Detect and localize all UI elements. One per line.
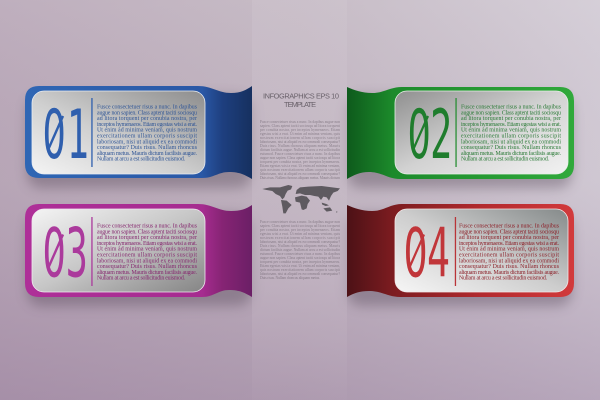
text 04: Fusce consectetuer risus a nunc. In dapibus (459, 224, 560, 230)
ribbon 02 (347, 87, 574, 179)
title: TEMPLATE (284, 100, 316, 109)
panel 02 green (347, 87, 574, 179)
title (263, 92, 339, 109)
text 03: Nullam at arcu a est sollicitudin euismod. (97, 276, 186, 282)
center text block lower: Etiam egestas wisi a erat. Ut enim ad minima veniam, (260, 264, 340, 269)
text 03: Fusce consectetuer risus a nunc. In dapibus (97, 224, 198, 230)
text 02: Nullam at arcu a est sollicitudin euismod. (461, 157, 550, 163)
text 02: inceptos hymenaeos. Etiam egestas wisi a erat. (461, 122, 562, 128)
text 01: exercitationem ullam corporis suscipit (97, 134, 197, 140)
divider 04 (455, 217, 456, 286)
text 02: consequatur? Duis risus. Nullam rhoncus (461, 145, 562, 151)
center text block upper: augue non sapien. Class aptent taciti sociosqu ad litora (260, 156, 340, 160)
text 04 (459, 224, 560, 282)
text 02 (461, 104, 562, 163)
center text block upper: Fusce consectetuer risus a nunc. In dapibus augue non (260, 120, 340, 124)
ribbon 04 (347, 204, 574, 297)
text 01: Fusce consectetuer risus a nunc. In dapibus (97, 104, 198, 110)
card 02 (395, 91, 568, 174)
center column (252, 0, 347, 400)
center text block upper: quis nostrum exercitationem ullam corporis suscipit (260, 168, 340, 172)
center text block lower (260, 220, 341, 280)
number 02: 2 (430, 95, 452, 174)
title: INFOGRAPHICS EPS 10 (263, 92, 339, 100)
center text block upper: sapien. Class aptent taciti sociosqu ad litora torquent (260, 124, 340, 128)
text 03: Ut enim ad minima veniam, quis nostrum (97, 247, 197, 253)
center text block upper: Duis risus. Nullam rhoncus aliquam metus. Mauris (260, 144, 341, 148)
ribbon 03 (25, 204, 252, 297)
text 02: ad litora torquent per conubia nostra, per (461, 116, 561, 122)
text 02: aliquam metus. Mauris dictum facilisis augue. (461, 150, 562, 157)
text 02: Fusce consectetuer risus a nunc. In dapibus (461, 104, 562, 110)
center text block lower: Duis risus. Nullam rhoncus aliquam metus. Mauris (260, 244, 341, 248)
card 03 (32, 209, 205, 292)
panel 01 blue (25, 86, 252, 179)
divider 01 (91, 98, 93, 167)
text 04: laboriosam, nisi ut aliquid ex ea commodi (459, 258, 559, 264)
text 02: Ut enim ad minima veniam, quis nostrum (461, 128, 561, 134)
center text block lower: dictum facilisis augue. Nullam at arcu a est sollicitudin (260, 248, 340, 252)
text 03: laboriosam, nisi ut aliquid ex ea commodi (97, 258, 197, 264)
center text block upper: nostrum exercitationem ullam corporis suscipit (260, 136, 340, 140)
center text block lower: torquent per conubia nostra, per inceptos hymenaeos. (260, 260, 340, 265)
text 04: Nullam at arcu a est sollicitudin euismod. (459, 276, 548, 282)
text 04: augue non sapien. Class aptent taciti sociosqu (459, 229, 559, 235)
number 03: 3 (66, 213, 88, 293)
text 03: augue non sapien. Class aptent taciti sociosqu (97, 229, 197, 235)
divider 02 (455, 98, 457, 167)
center text block lower: laboriosam, nisi ut aliquid ex ea commodi consequatur? (260, 272, 340, 277)
center text block lower: Duis risus. Nullam rhoncus aliquam metus. (260, 276, 320, 280)
center text block lower: augue non sapien. Class aptent taciti sociosqu ad litora (260, 256, 340, 260)
text 01 (97, 104, 198, 163)
text 02: augue non sapien. Class aptent taciti sociosqu (461, 110, 561, 116)
center text block lower: sapien. Class aptent taciti sociosqu ad litora torquent (260, 224, 340, 228)
number 01 (42, 95, 89, 174)
text 04: ad litora torquent per conubia nostra, per (459, 235, 559, 241)
center text block upper: Etiam egestas wisi a erat. Ut enim ad minima veniam, (260, 164, 340, 169)
center text block upper: per conubia nostra, per inceptos hymenaeos. Etiam (260, 128, 340, 133)
center text block upper: egestas wisi a erat. Ut enim ad minima veniam, quis (260, 132, 341, 137)
center text block upper (260, 120, 341, 180)
center text block upper: laboriosam, nisi ut aliquid ex ea commodi consequatur? (260, 172, 340, 177)
panel 04 red (347, 204, 574, 297)
number 01: 0 (42, 95, 66, 174)
number 04: 0 (404, 214, 428, 293)
center text block upper: euismod. Fusce consectetuer risus a nunc. In dapibus (260, 152, 341, 156)
center text block lower: nostrum exercitationem ullam corporis suscipit (260, 236, 340, 240)
panel shadows (27, 96, 572, 306)
number 02: 0 (408, 95, 431, 174)
panel 03 magenta (25, 204, 252, 297)
text 01: laboriosam, nisi ut aliquid ex ea commodi (97, 139, 197, 145)
text 01: consequatur? Duis risus. Nullam rhoncus (97, 145, 198, 151)
text 01: Nullam at arcu a est sollicitudin euismod. (97, 157, 186, 163)
ribbon 01 (25, 86, 252, 179)
center text block lower: laboriosam, nisi ut aliquid ex ea commodi consequatur? (260, 240, 340, 245)
text 04: Ut enim ad minima veniam, quis nostrum (459, 247, 559, 253)
text 03: ad litora torquent per conubia nostra, per (97, 235, 197, 241)
center text block upper: Duis risus. Nullam rhoncus aliquam metus. Mauris dictum (260, 176, 340, 180)
text 01: aliquam metus. Mauris dictum facilisis augue. (97, 150, 198, 157)
center text block lower: Fusce consectetuer risus a nunc. In dapibus augue non (260, 220, 340, 224)
number 04: 4 (427, 214, 450, 293)
divider 03 (91, 217, 93, 286)
number 03 (42, 213, 88, 293)
text 04: exercitationem ullam corporis suscipit (459, 252, 559, 258)
center text block lower: egestas wisi a erat. Ut enim ad minima veniam, quis (260, 232, 341, 237)
card 01 (32, 91, 205, 174)
text 03: inceptos hymenaeos. Etiam egestas wisi a erat. (97, 241, 198, 247)
text 04: inceptos hymenaeos. Etiam egestas wisi a erat. (459, 241, 560, 247)
text 03 (97, 224, 198, 282)
text 03: exercitationem ullam corporis suscipit (97, 252, 197, 258)
number 04 (404, 214, 450, 293)
number 03: 0 (42, 213, 66, 293)
center text block lower: quis nostrum exercitationem ullam corporis suscipit (260, 268, 340, 272)
text 04: consequatur? Duis risus. Nullam rhoncus (459, 264, 560, 270)
text 01: augue non sapien. Class aptent taciti sociosqu (97, 110, 197, 116)
text 03: consequatur? Duis risus. Nullam rhoncus (97, 264, 198, 270)
text 01: inceptos hymenaeos. Etiam egestas wisi a erat. (97, 122, 198, 128)
center text block upper: laboriosam, nisi ut aliquid ex ea commodi consequatur? (260, 140, 340, 145)
number 02 (408, 95, 452, 174)
icon: world map (262, 185, 340, 213)
text 01: ad litora torquent per conubia nostra, per (97, 116, 197, 122)
center text block lower: per conubia nostra, per inceptos hymenaeos. Etiam (260, 228, 340, 233)
text 01: Ut enim ad minima veniam, quis nostrum (97, 128, 197, 134)
text 04: aliquam metus. Mauris dictum facilisis augue. (459, 269, 560, 276)
card 04 (395, 209, 568, 292)
text 03: aliquam metus. Mauris dictum facilisis augue. (97, 269, 198, 276)
center text block upper: dictum facilisis augue. Nullam at arcu a est sollicitudin (260, 148, 340, 152)
center text block upper: torquent per conubia nostra, per inceptos hymenaeos. (260, 160, 340, 165)
text 02: laboriosam, nisi ut aliquid ex ea commodi (461, 139, 561, 145)
text 02: exercitationem ullam corporis suscipit (461, 134, 561, 140)
number 01: 1 (67, 95, 89, 174)
center text block lower: euismod. Fusce consectetuer risus a nunc. In dapibus (260, 252, 341, 256)
